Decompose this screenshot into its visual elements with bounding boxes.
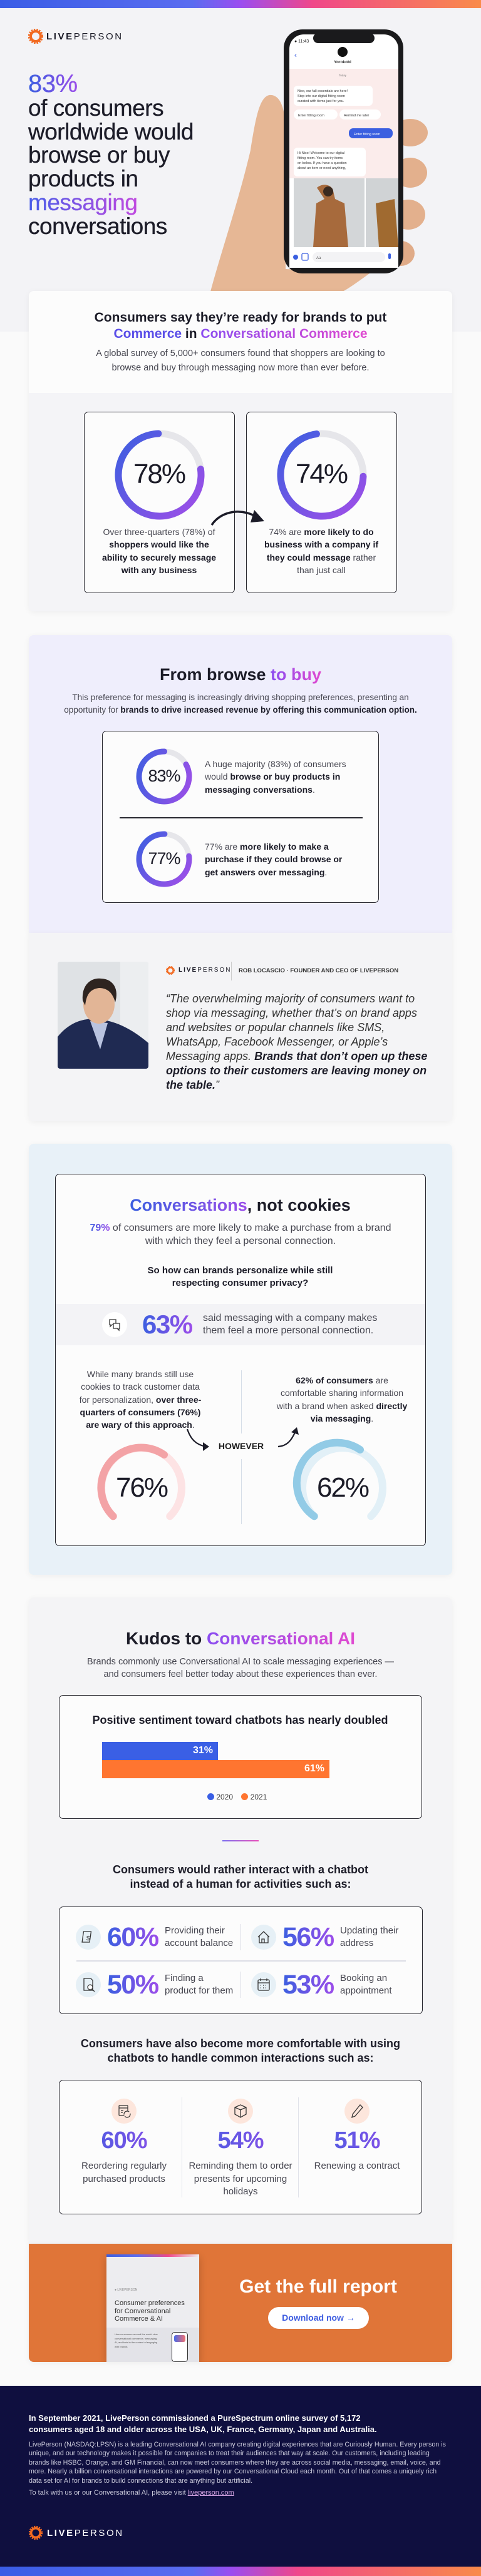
phone in hand illustration: Yorokobi [334,60,351,64]
stat: 60% account balance [76,1922,233,1952]
phone in hand illustration: ‹ [294,51,297,59]
bar chart: positive sentiment [59,1695,422,1819]
report cover: ● LIVEPERSON [115,2288,137,2292]
heading: chatbot vs human: instead of a human for activities such as: [130,1878,351,1890]
phone in hand illustration: Step into our digital fitting room [297,94,345,98]
divider [120,817,363,818]
panel: CEO quote [29,933,452,1121]
footer about: LivePerson (NASDAQ:LPSN) is a leading Conversational AI company creating digital experiences that are Curiously Human. Every person is unique, and our technology makes it possible for companies to treat their audiences that way at scale. Our customers, including leading brands like HSBC, Orange, and GM Financial, can now meet consumers where they are across social media, messaging, email, voice, and more. Nearly a billion conversational interactions are powered by our Conversational Cloud each month. Out of that comes a uniquely rich data set for AI for brands to build connections that are anything but artificial. [29,2441,446,2485]
caption: Over three-quarters (78%) of shoppers would like the ability to securely message with any business [102,527,216,575]
arrows [187,1427,299,1451]
stat: 51% renewing: Renewing a contract [314,2161,400,2171]
stat: 56% address [251,1922,398,1952]
stat: 51% renewing: 51% [334,2127,380,2154]
legend: 2020 2021 [216,1793,267,1801]
ring chart 74 [277,430,367,519]
stat: 56% address: 56% [282,1922,334,1952]
row divider [76,1960,406,1961]
panel: from browse to buy [29,635,452,933]
ring 83 [137,748,192,805]
phone in hand illustration: on below. If you have a question [297,161,347,165]
report cover: Consumer preferences for Conversational Commerce & AI [115,2299,185,2323]
header block [29,291,452,393]
bottom gradient bar [0,2567,481,2576]
stat box: 74% [246,412,397,593]
intro: 79% of consumers are more likely to make a purchase from a brand with which they feel a personal connection. [90,1223,391,1246]
logo: liveperson [28,29,123,44]
logo row: LIVEPERSON [178,967,231,974]
footer link: To talk with us or our Conversational AI, please visit liveperson.com [29,2489,234,2497]
stat box: 78% [84,412,235,593]
phone in hand illustration [210,29,428,291]
phone in hand illustration: Nico, our fall essentials are here! [297,89,348,93]
phone in hand illustration: ● 11:43 [294,39,309,44]
button: Download now → [282,2313,355,2323]
heading: comfortable: chatbots to handle common interactions such as: [107,2052,374,2064]
phone in hand illustration: Enter fitting room [298,114,324,118]
heading: comfortable [81,2037,400,2064]
stat: 53% booking: Booking an appointment [340,1973,392,1996]
stat box: 83 / 77: 83% [148,766,180,785]
logo row [166,962,398,980]
arrow: 78 to 74 [210,510,264,526]
stat: 53% booking [251,1970,392,2000]
footer methodology: In September 2021, LivePerson commissioned a PureSpectrum online survey of 5,172 consumers aged 18 and older across the USA, UK, France, Germany, Japan and Australia. [29,2413,377,2434]
text: 62% [317,1472,368,1503]
logo: liveperson: LIVEPERSON [46,31,123,42]
stat: 60% account balance: Providing their account balance [165,1925,233,1948]
band: 63% [56,1304,427,1345]
caption: 74% are more likely to do business with a company if they could message rather than just call [264,527,378,575]
bar 2021 [102,1760,329,1778]
phone in hand illustration: curated with items just for you. [297,99,344,103]
heading: Commerce in Conversational Commerce [114,327,367,341]
photo: Rob LoCascio [58,962,148,1069]
hero headline: messaging [28,190,137,215]
icon: chat bubbles [102,1312,127,1337]
gauge 76 [97,1444,185,1520]
text: 76% [116,1472,167,1503]
stat: 60% account balance: 60% [107,1922,158,1952]
heading [95,310,387,341]
heading: Consumers say they’re ready for brands to put [95,310,386,325]
heading: Kudos to Conversational AI [126,1629,355,1648]
report cover [106,2254,199,2362]
heading: chatbot vs human: Consumers would rather interact with a chatbot [113,1863,368,1876]
phone in hand illustration: Enter fitting room [354,133,380,136]
bar chart: positive sentiment: Positive sentiment toward chatbots has nearly doubled [92,1714,388,1726]
stat box: 74%: 74% [296,459,347,489]
hand palm [210,95,370,294]
stat: 53% booking: 53% [282,1970,334,2000]
gauge 62 [293,1439,386,1520]
stat: 50% finding product: 50% [107,1970,158,2000]
bar 2021: 61% [304,1763,324,1774]
divider accent [222,1840,259,1841]
question [148,1265,333,1288]
ring 77 [137,831,192,887]
stat: 50% finding product [76,1970,233,2000]
phone in hand illustration: Hi Nico! Welcome to our digital [297,151,344,155]
stat: 51% renewing [314,2099,400,2171]
stat: 54% presents: Reminding them to order presents for upcoming holidays [189,2161,292,2197]
band: 63%: said messaging with a company makes them feel a more personal connection. [203,1313,377,1336]
phone in hand illustration: Aa [316,257,321,260]
hero background [0,8,481,332]
phone in hand illustration: Today [339,74,347,77]
panel: commerce in conversational commerce [29,291,452,611]
vertical divider [241,1370,242,1433]
cta heading: Get the full report [239,2276,397,2297]
top gradient bar [0,0,481,8]
HOWEVER label: HOWEVER [219,1441,264,1451]
panel: kudos to conversational AI [29,1597,452,2244]
phone in hand illustration: about an item or need anything, [297,166,346,170]
hero headline: products in [28,166,138,191]
stat: 60% reordering: 60% [101,2127,147,2154]
banner: get the full report [29,2244,452,2362]
bar 2020: 31% [193,1745,213,1756]
stat: 60% reordering [81,2099,167,2184]
stat box: 83 / 77: 77% [148,849,180,868]
stat: 54% presents: 54% [217,2127,264,2154]
heading: Conversations, not cookies [130,1196,351,1214]
stat: 60% account balance: $ [86,1935,90,1942]
bar 2020 [102,1742,218,1760]
button [268,2307,369,2329]
stats grid: chatbot vs human [59,1907,423,2014]
hero headline: browse or buy [28,142,170,168]
stat: 56% address: Updating their address [340,1925,398,1948]
quote: “The overwhelming majority of consumers want to shop via messaging, whether that’s on brand apps and websites or popular channels like SMS, WhatsApp, Facebook Messenger, or Apple’s Messaging apps. Brands that don’t open up these options to their customers are leaving money on the table.” [166,992,427,1091]
hero headline: conversations [28,213,167,239]
phone body [284,29,403,273]
report cover: How consumers around the world view conversational commerce, messaging, AI, and bots in the context of engaging with brands [115,2333,158,2348]
hero headline: worldwide would [28,119,194,145]
heading: From browse to buy [160,665,321,684]
footer [0,2386,481,2567]
text 83: A huge majority (83%) of consumers would browse or buy products in messaging conversations. [205,759,346,795]
heading: chatbot vs human [113,1863,368,1890]
stat: 50% finding product: Finding a product for them [165,1973,233,1996]
stat: 60% reordering: Reordering regularly purchased products [81,2161,167,2184]
phone in hand illustration: fitting room. You can try items [297,156,343,160]
left text: While many brands still use cookies to track customer data for personalization, over three-quarters of consumers (76%) are wary of this approach. [80,1369,201,1430]
subtitle: Brands commonly use Conversational AI to scale messaging experiences — and consumers feel better today about these experiences than ever. [87,1657,394,1679]
stat box: 78%: 78% [133,459,185,489]
text 77: 77% are more likely to make a purchase if they could browse or get answers over messaging. [205,842,342,877]
question: So how can brands personalize while still [148,1265,333,1276]
question: respecting consumer privacy? [172,1278,308,1288]
subtitle: This preference for messaging is increasingly driving shopping preferences, presenting an opportunity for brands to drive increased revenue by offering this communication option. [64,693,417,715]
hero headline [28,70,194,239]
logo row: ROB LOCASCIO · FOUNDER AND CEO OF LIVEPERSON [239,967,398,974]
footer logo: LIVEPERSON [47,2528,124,2538]
footer logo [29,2525,124,2540]
panel: conversations not cookies [29,1144,452,1575]
right text: 62% of consumers are comfortable sharing information with a brand when asked directly via messaging. [277,1375,407,1423]
stat: 54% presents [189,2099,292,2197]
stat box: 83 / 77 [102,731,379,903]
hero headline: 83% [28,70,78,98]
hero headline: of consumers [28,95,163,121]
subtitle: A global survey of 5,000+ consumers found that shoppers are looking to browse and buy through messaging now more than ever before. [96,349,385,373]
heading: comfortable: Consumers have also become more comfortable with using [81,2037,400,2050]
phone in hand illustration: Remind me later [344,114,370,118]
stats grid: common interactions [59,2080,422,2214]
ring chart 78 [115,430,204,519]
band: 63%: 63% [142,1310,192,1339]
